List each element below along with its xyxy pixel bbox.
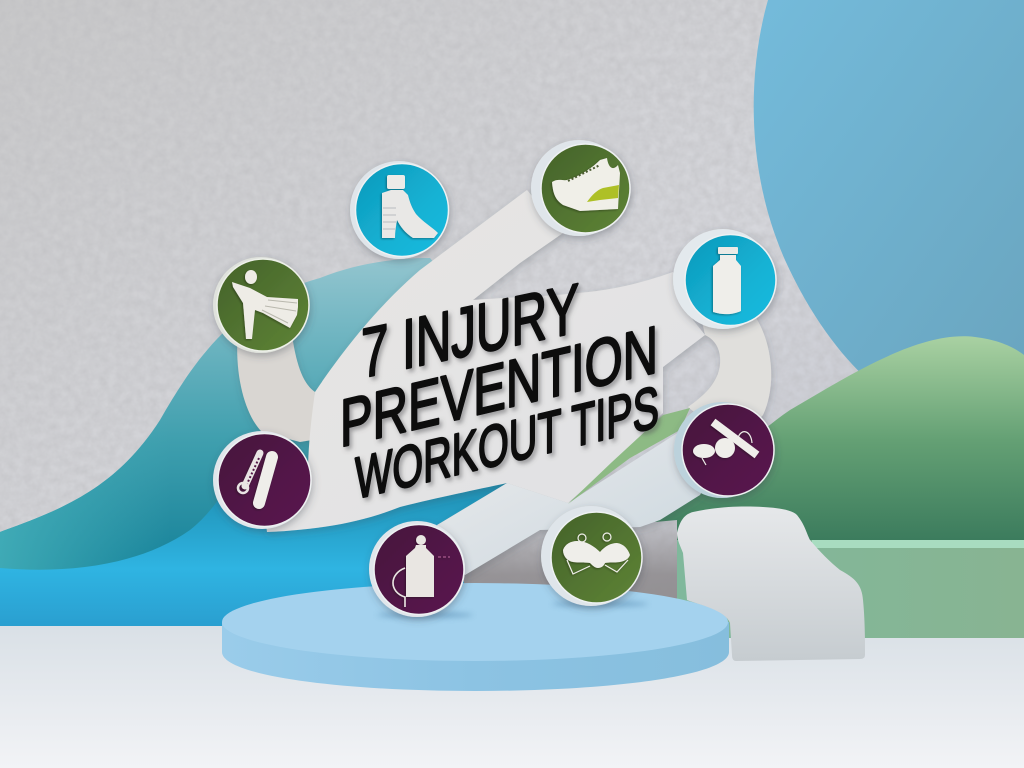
icon: spray bottle <box>369 521 465 617</box>
icon: exercise balls and roller <box>674 402 774 498</box>
podium <box>222 583 729 691</box>
title line 2: PREVENTION <box>340 313 658 462</box>
icon: water bottle <box>673 229 776 329</box>
icon: resistance band <box>213 431 311 529</box>
right loop <box>688 312 771 445</box>
left loop <box>237 330 315 442</box>
large blue circle shape <box>754 0 1024 382</box>
lower ribbon to bottle <box>437 425 725 575</box>
green sliver <box>568 408 690 504</box>
icon: running shoe <box>531 140 630 236</box>
blue wave <box>0 483 507 626</box>
icon: sports bra <box>541 506 642 606</box>
icon: stretching figure <box>213 257 309 353</box>
central banner and ribbon to shoe <box>260 190 705 532</box>
title line 1: 7 INJURY <box>361 268 579 393</box>
white ribbon banner <box>237 190 771 575</box>
icon: ankle boot <box>350 161 448 259</box>
title line 3: WORKOUT TIPS <box>355 373 659 512</box>
title <box>340 268 659 512</box>
green platform box <box>677 540 1024 638</box>
white block <box>677 507 865 661</box>
green hills <box>655 336 1024 545</box>
floor <box>0 624 1024 768</box>
teal wave <box>0 258 507 590</box>
